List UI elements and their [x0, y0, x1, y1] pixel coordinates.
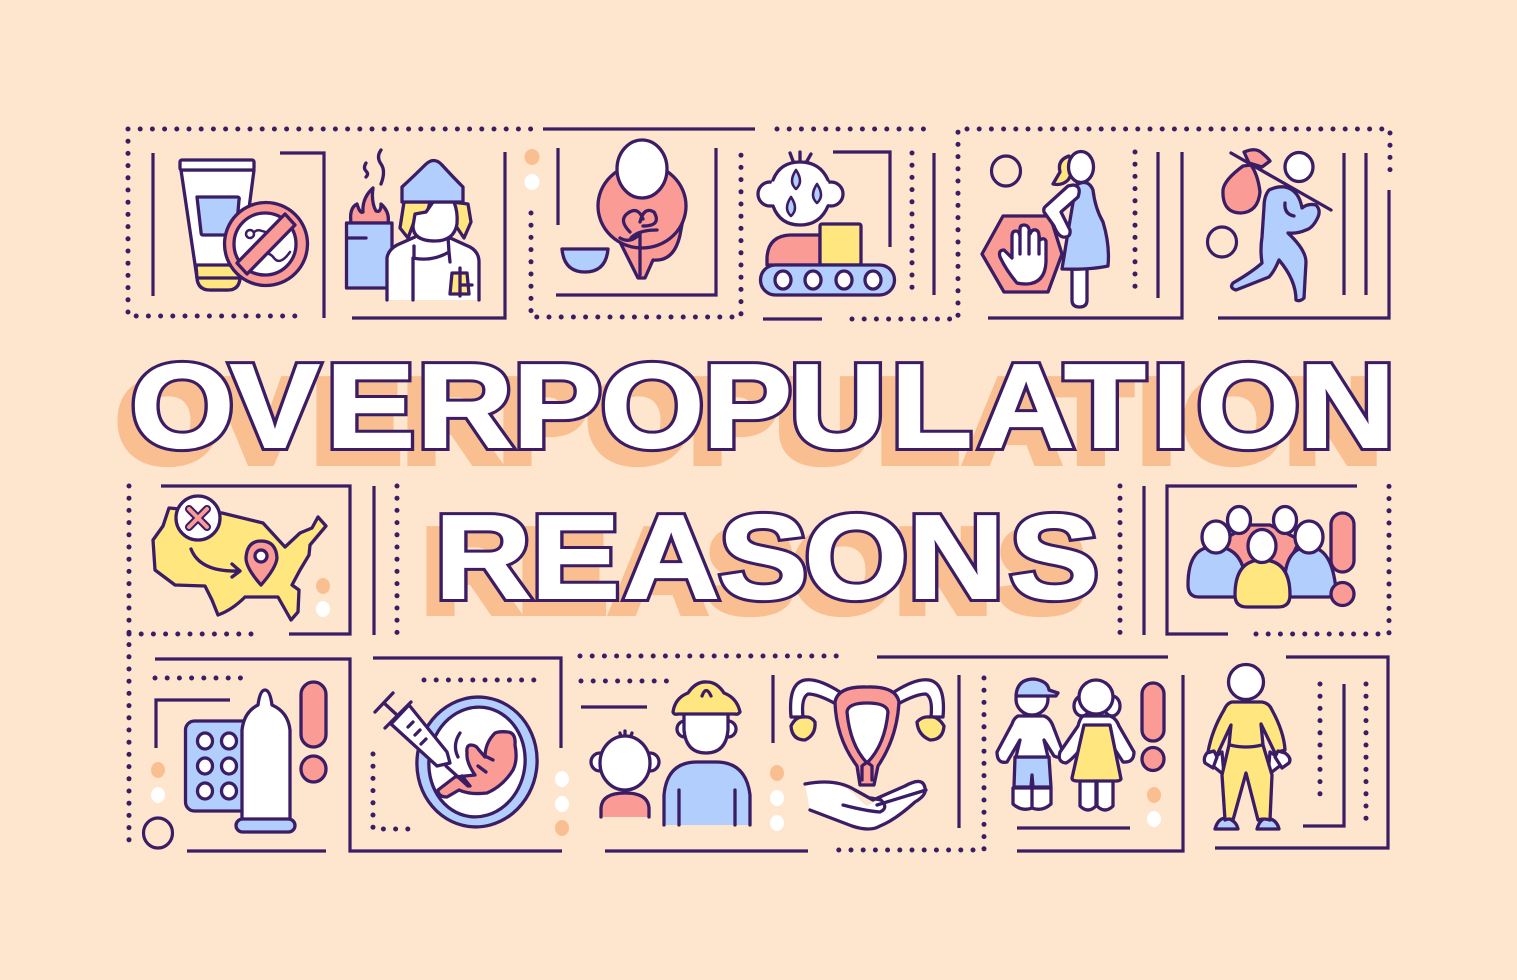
icon: migrant running with bag — [1223, 150, 1331, 301]
title shadow: OVERPOPULATION — [116, 355, 1381, 487]
title shadow — [116, 355, 1381, 637]
accent dots and outlined circles — [144, 149, 1236, 848]
title text: REASONS — [435, 491, 1099, 623]
icon: poor man with empty pockets — [1204, 664, 1290, 829]
icon: homeless person by burning barrel — [346, 150, 479, 300]
icon: pill pack and condom — [186, 690, 295, 832]
icon: contraceptive cream with no-sperm sign — [180, 160, 308, 290]
icon: exclamation 1 — [301, 682, 326, 782]
title text: OVERPOPULATION — [130, 340, 1395, 472]
icon: crying baby with conveyor belt — [758, 152, 894, 295]
icon: baby and construction worker — [591, 682, 750, 825]
icon: exclamation 2 — [1142, 683, 1164, 770]
title shadow: REASONS — [422, 505, 1086, 637]
icon: boy and girl holding hands — [997, 679, 1134, 810]
icon: syringe injecting embryo — [375, 689, 545, 835]
title text — [130, 340, 1395, 623]
title outline: OVERPOPULATION — [130, 340, 1395, 472]
title — [116, 340, 1395, 637]
icon: pregnant woman with stop sign — [982, 152, 1108, 307]
title outline — [130, 340, 1395, 623]
icon: USA map with relocation pin — [153, 496, 326, 620]
icon: woman sitting hungry with empty bowl — [562, 140, 686, 278]
title outline: REASONS — [435, 491, 1099, 623]
icon: crowd with exclamation — [1188, 506, 1354, 607]
icon: uterus held over hand — [791, 680, 944, 829]
